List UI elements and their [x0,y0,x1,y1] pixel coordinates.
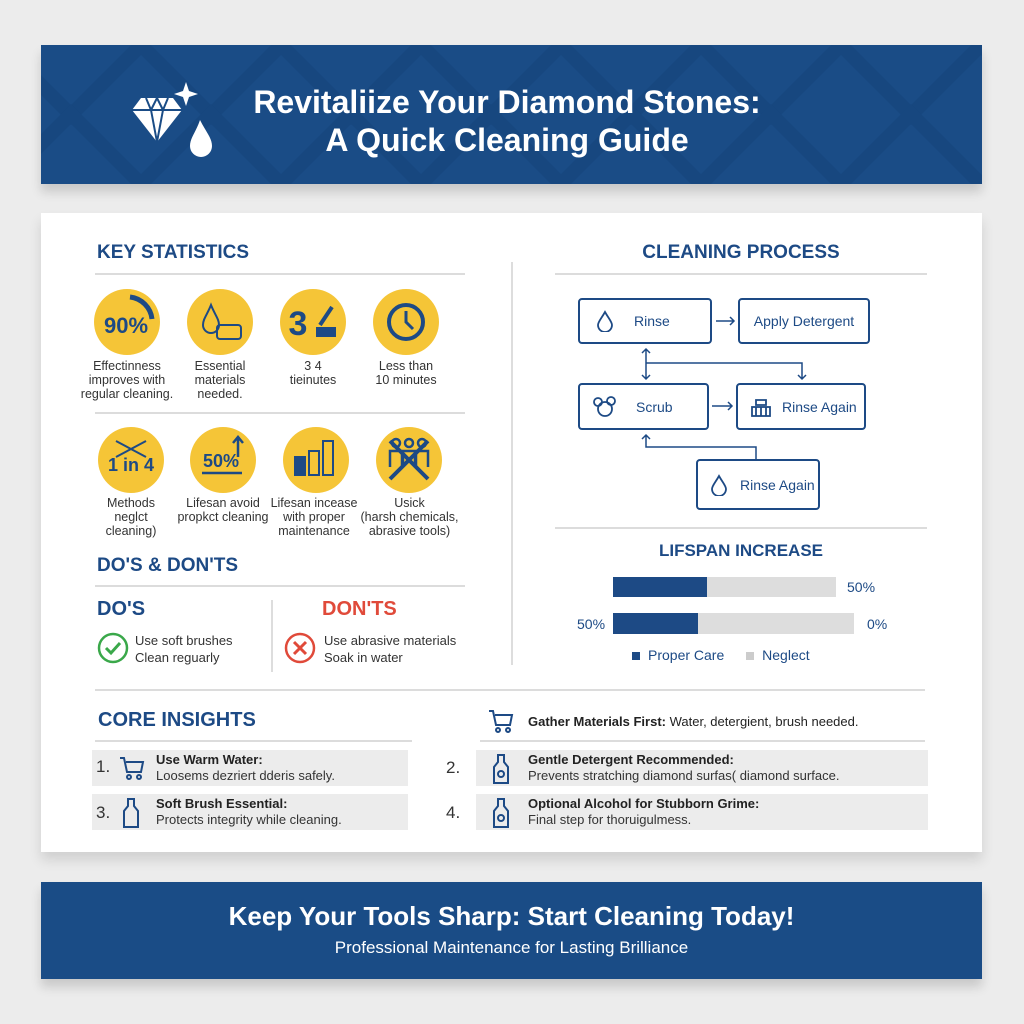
insight 2: Prevents stratching diamond surfas( diamond surface. [528,768,839,783]
panel: donts: DON'TS [322,598,397,620]
stat: crossed people [376,427,442,493]
step: scrub: Scrub [636,398,673,414]
insight 3 [92,794,408,830]
panel: donts [284,598,456,665]
insight 1: Loosems dezriert dderis safely. [156,768,335,783]
insight 3: 3. [96,803,110,822]
panel: dos [97,598,233,665]
step: rinse again 2: Rinse Again [740,476,815,492]
stat: 3 [280,289,346,355]
main panel [41,213,982,852]
step: rinse again: Rinse Again [782,398,857,414]
insight 2 [476,750,928,786]
panel: dos: DO'S [97,598,145,620]
panel: statistics icons: Lifesan avoid propkct cleaning [177,496,269,524]
panel: statistics icons: 10 minutes [375,373,437,387]
text: 4. [446,803,460,822]
callout: gather materials: Gather Materials First: Water, detergient, brush needed. [528,714,858,729]
panel: dos: Clean reguarly [135,650,220,665]
stat: 3: 3 [289,305,307,343]
chart: lifespan bars: 50% [577,616,605,632]
panel: statistics icons: Lifesan incease with proper maintenance [271,496,357,538]
panel: statistics icons: Essential [195,359,245,373]
stat: clock [373,289,439,355]
heading: lifespan increase: LIFSPAN INCREASE [659,541,823,560]
insight 1 [92,750,408,786]
step: rinse [578,298,712,344]
step: apply detergent: Apply Detergent [754,313,854,329]
step: scrub [578,383,709,430]
panel: donts: Use abrasive materials [324,633,456,648]
panel: statistics icons: neglct [114,510,148,524]
insight 2: Gentle Detergent Recommended: [528,752,734,767]
panel: dos: Use soft brushes [135,633,233,648]
icon: diamond and droplet [132,82,212,157]
panel: statistics icons: 3 4 [304,359,322,373]
panel: statistics icons: tieinutes [290,373,336,387]
stat: 1 in 4: 1 in 4 [108,455,154,475]
callout: gather materials [489,710,858,733]
panel: statistics icons: materials [195,373,245,387]
insight 3: Soft Brush Essential: [156,796,287,811]
insight 4: Final step for thoruigulmess. [528,812,691,827]
panel: statistics icons: needed. [197,387,243,401]
panel: statistics icons: cleaning) [106,524,156,538]
insight 1: Use Warm Water: [156,752,263,767]
heading: core insights: CORE INSIGHTS [98,709,256,731]
panel: statistics icons: Effectinness improves with regular cleaning. [81,359,173,401]
insight 4: Optional Alcohol for Stubborn Grime: [528,796,759,811]
step: rinse again [736,383,866,430]
title: A Quick Cleaning Guide [325,122,689,158]
text: 2. [446,758,460,777]
title: Revitaliize Your Diamond Stones: [253,84,761,120]
chart: lifespan bars: 50% [847,579,875,595]
heading: cleaning process: CLEANING PROCESS [642,242,840,263]
stat: 90%: 90% [104,313,148,338]
heading: key statistics: KEY STATISTICS [97,242,249,263]
insight 4 [476,794,928,830]
title [253,84,761,158]
insight 3: Protects integrity while cleaning. [156,812,342,827]
panel: statistics icons: Usick [394,496,425,510]
panel: statistics icons: Less than [379,359,433,373]
flowchart: cleaning process [578,298,870,510]
footer banner: Professional Maintenance for Lasting Brilliance [335,938,688,957]
step: apply detergent [738,298,870,344]
legend: Proper Care Neglect [648,647,810,663]
header banner [41,45,982,184]
stat: materials [187,289,253,355]
panel: statistics icons [81,289,465,538]
stat: 50% [190,427,256,493]
stat: 50%: 50% [203,451,239,471]
chart: lifespan bars [577,577,887,663]
step: rinse: Rinse [634,313,670,329]
panel: statistics icons: (harsh chemicals, abrasive tools) [361,510,458,538]
step: rinse again 2 [696,459,820,510]
stat: bar growth [283,427,349,493]
footer banner [41,882,982,979]
heading: dos and donts: DO'S & DON'TS [97,555,238,576]
chart: lifespan bars: 0% [867,616,887,632]
stat: 90% [94,289,160,355]
panel: statistics icons: Methods [107,496,155,510]
panel: donts: Soak in water [324,650,403,665]
insight 1: 1. [96,757,110,776]
stat: 1 in 4 [98,427,164,493]
footer banner: Keep Your Tools Sharp: Start Cleaning Today! [229,901,794,931]
